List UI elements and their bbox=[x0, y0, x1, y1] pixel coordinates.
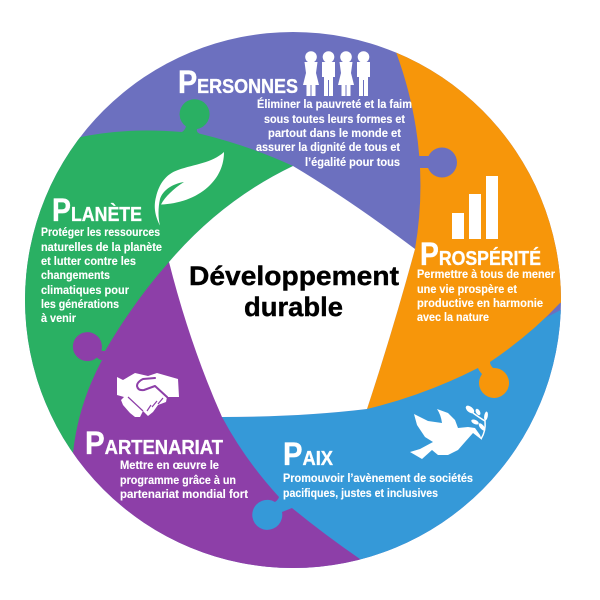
title: développement durable: Développement bbox=[189, 261, 399, 291]
text: paix description bbox=[283, 473, 473, 500]
icon: leaf bbox=[155, 152, 224, 226]
text: personnes description: l’égalité pour tous bbox=[305, 157, 400, 169]
puzzle knob: personnes bbox=[414, 148, 457, 178]
heading: planète: PLANÈTE bbox=[52, 192, 142, 228]
text: prospérité description: Permettre à tous de mener bbox=[417, 269, 555, 281]
text: partenariat description: partenariat mondial fort bbox=[120, 489, 248, 501]
heading: personnes: PERSONNES bbox=[178, 64, 298, 100]
title: développement durable bbox=[189, 261, 399, 322]
panel: paix bbox=[222, 310, 561, 560]
text: paix description: Promouvoir l’avènement de sociétés bbox=[283, 473, 473, 485]
title: développement durable: durable bbox=[244, 292, 343, 322]
text: personnes description: Éliminer la pauvreté et la faim bbox=[257, 98, 412, 111]
sustainable development wheel bbox=[25, 32, 561, 568]
text: planète description: à venir bbox=[41, 313, 76, 325]
text: prospérité description: une vie prospère et bbox=[417, 284, 517, 296]
text: planète description: et lutter contre les bbox=[41, 256, 136, 268]
heading: partenariat: PARTENARIAT bbox=[85, 425, 223, 461]
text: planète description: les générations bbox=[41, 299, 119, 311]
text: prospérité description: productive en harmonie bbox=[417, 298, 543, 310]
text: paix description: pacifiques, justes et inclusives bbox=[283, 488, 438, 500]
icon: dove bbox=[410, 404, 489, 459]
text: personnes description bbox=[256, 98, 412, 169]
icon: people bbox=[303, 51, 370, 96]
segment: planète bbox=[25, 99, 293, 453]
segment: prospérité bbox=[367, 52, 561, 409]
text: partenariat description: Mettre en œuvre le bbox=[120, 460, 219, 472]
text: partenariat description bbox=[120, 460, 248, 501]
panel: personnes bbox=[178, 51, 457, 178]
text: planète description: naturelles de la planète bbox=[41, 242, 162, 254]
panel: planète bbox=[25, 99, 293, 453]
segment: paix bbox=[222, 310, 561, 560]
text: personnes description: assurer la dignité de tous et bbox=[256, 142, 400, 154]
text: prospérité description: avec la nature bbox=[417, 312, 489, 324]
panel: prospérité bbox=[367, 52, 561, 409]
icon: rising bars bbox=[452, 176, 498, 239]
text: personnes description: partout dans le monde et bbox=[268, 128, 401, 140]
heading: prospérité: PROSPÉRITÉ bbox=[420, 236, 541, 272]
text: planète description: changements bbox=[41, 270, 110, 282]
text: partenariat description: programme grâce à un bbox=[120, 475, 236, 487]
heading: paix: PAIX bbox=[283, 436, 334, 472]
segment: partenariat bbox=[72, 262, 360, 568]
panel: partenariat bbox=[72, 262, 360, 568]
text: planète description: Protéger les ressources bbox=[41, 227, 160, 239]
center: white pentagon bbox=[169, 166, 415, 417]
text: prospérité description bbox=[417, 269, 555, 324]
segment: personnes background bbox=[25, 32, 561, 568]
text: planète description: climatiques pour bbox=[41, 285, 129, 297]
text: planète description bbox=[41, 227, 162, 325]
text: personnes description: sous toutes leurs formes et bbox=[264, 114, 405, 126]
icon: handshake bbox=[117, 373, 179, 417]
